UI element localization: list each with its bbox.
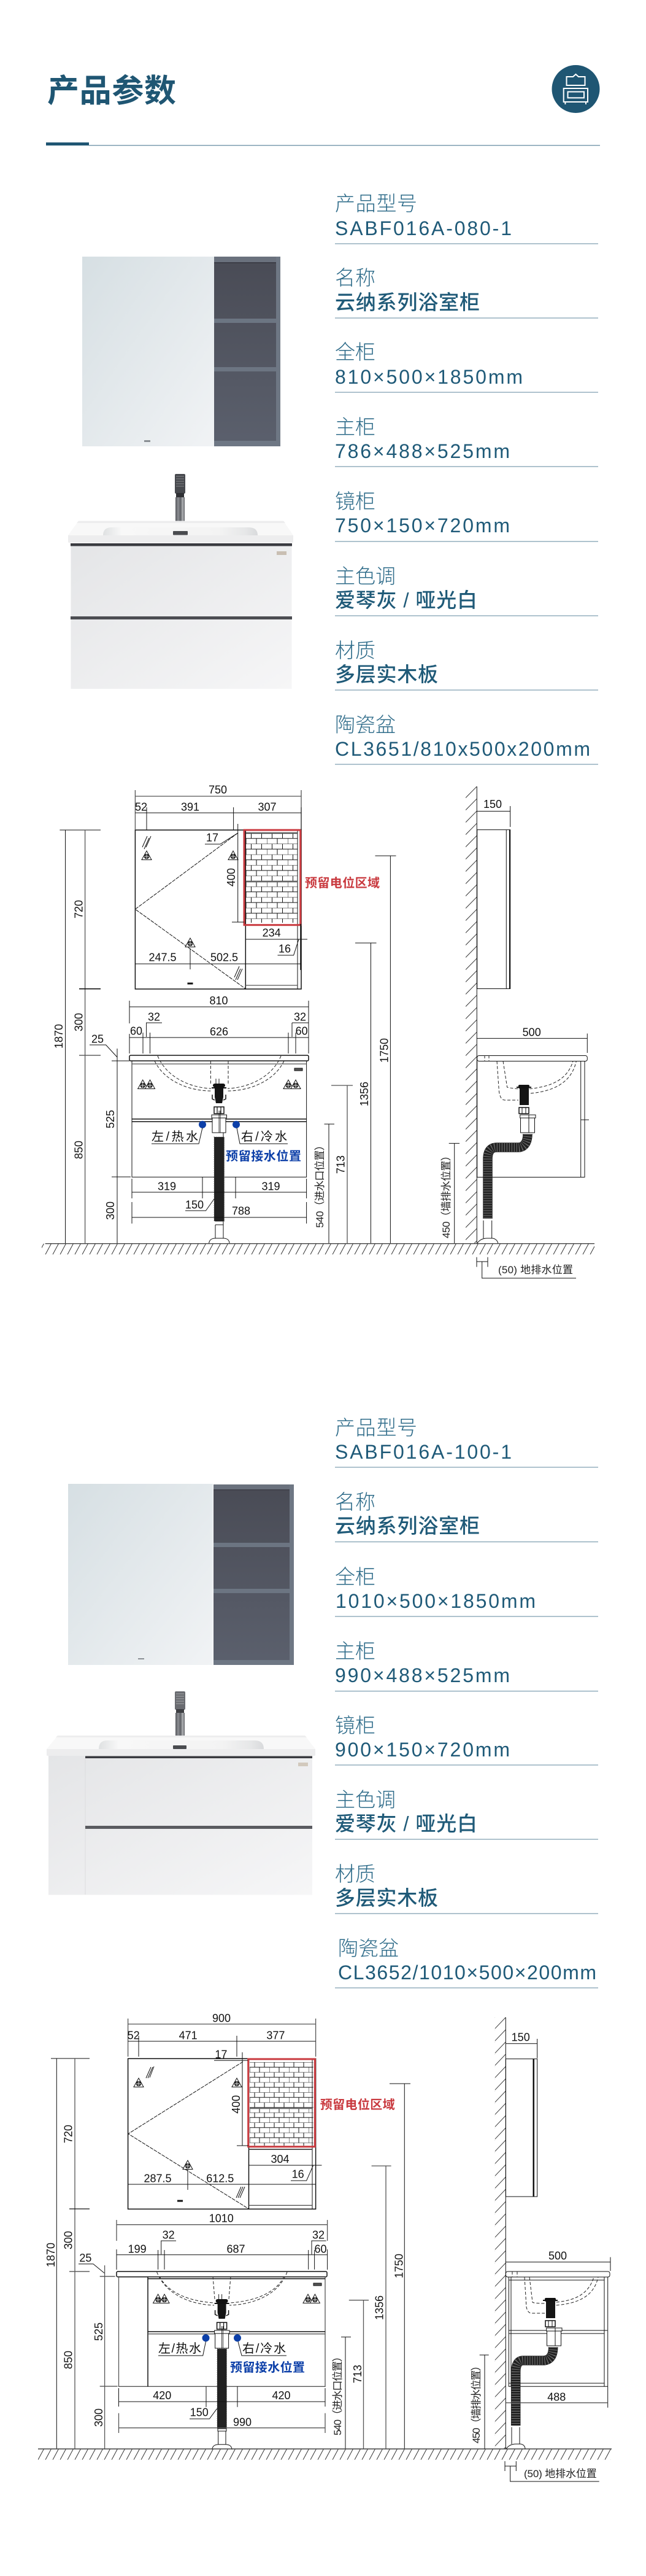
water supply points [158, 2334, 286, 2356]
vanity dimensions: 687 [226, 2243, 245, 2256]
water supply points: 左/热水 [158, 2341, 201, 2356]
vanity side: 500 [523, 1026, 541, 1039]
wall and floor drain dimensions [440, 1143, 576, 1278]
vanity dimensions: 25 [79, 2252, 91, 2264]
label: reserved electrical area: 预留电位区域 [305, 875, 380, 890]
vanity dimensions: 420 [153, 2389, 171, 2402]
wall and floor drain dimensions [471, 2355, 599, 2481]
spec: main colour [335, 1788, 598, 1839]
height dimensions: 300 [72, 1013, 85, 1031]
mirror cabinet dimensions: 52 [128, 2030, 140, 2042]
mirror cabinet dimensions: 17 [206, 831, 218, 844]
water supply points: 左/热水 [152, 1130, 198, 1144]
product photo: mirror cabinet 1 [82, 257, 280, 446]
drawing: product 2 side elevation [471, 2017, 610, 2481]
mirror cabinet dimensions: 247.5 [148, 952, 177, 964]
vanity dimensions: 199 [128, 2243, 147, 2256]
vanity dimensions: 32 [163, 2229, 175, 2241]
mirror cabinet dimensions [128, 2012, 321, 2190]
vanity dimensions: 300 [104, 1201, 117, 1220]
vanity dimensions [69, 2213, 328, 2449]
vanity dimensions: 990 [233, 2416, 252, 2429]
spec: name: 名称 [335, 266, 375, 289]
mirror cabinet side [477, 798, 510, 988]
spec: material: 多层实木板 [335, 663, 438, 686]
spec: ceramic basin [335, 713, 598, 764]
drawing: product 1 front elevation [42, 783, 594, 1254]
spec: name: 名称 [335, 1491, 375, 1513]
vanity dimensions: 300 [93, 2408, 105, 2427]
mirror cabinet dimensions: 900 [212, 2012, 231, 2025]
vanity dimensions: 60 [130, 1025, 142, 1038]
mirror cabinet dimensions: 400 [225, 868, 237, 886]
spec: main cabinet [335, 1640, 598, 1691]
label: reserved water position: 预留接水位置 [230, 2360, 305, 2375]
drawing: product 2 front elevation [38, 2012, 612, 2460]
vanity dimensions: 25 [91, 1033, 104, 1045]
height dimensions: 713 [335, 1155, 347, 1174]
spec: ceramic basin [335, 1937, 598, 1988]
product photo: mirror cabinet 2 [68, 1484, 294, 1665]
header rule [46, 142, 600, 146]
height dimensions: 720 [63, 2125, 75, 2143]
spec: model [335, 1416, 598, 1467]
spec: main cabinet: 主柜 [335, 416, 375, 438]
spec: material: 材质 [335, 639, 375, 662]
height dimensions: 850 [63, 2351, 75, 2369]
spec: material [335, 1863, 598, 1914]
height dimensions: 540（进水口位置） [314, 1140, 326, 1228]
wall and floor drain dimensions: (50) 地排水位置 [498, 1264, 573, 1276]
vanity dimensions [79, 995, 309, 1244]
spec: model: 产品型号 [335, 1416, 417, 1439]
drawing: product 1 side elevation [440, 786, 589, 1278]
spec: model: 产品型号 [335, 192, 417, 215]
mirror cabinet elevation [135, 830, 301, 989]
spec: overall size [335, 1565, 598, 1616]
spec: ceramic basin: CL3652/1010×500×200mm [338, 1961, 596, 1984]
mirror cabinet dimensions: 377 [266, 2030, 285, 2042]
vanity side [506, 2249, 610, 2449]
spec: main colour: 主色调 [335, 565, 396, 588]
spec: overall size: 810×500×1850mm [335, 366, 523, 388]
floor hatch [38, 2449, 612, 2460]
water supply points [152, 1121, 288, 1144]
faucet [174, 474, 186, 526]
vanity dimensions: 525 [104, 1110, 117, 1128]
vanity dimensions: 1010 [209, 2213, 234, 2225]
mirror cabinet dimensions: 471 [179, 2030, 198, 2042]
icon: cabinet badge [552, 65, 600, 113]
vanity elevation [129, 1055, 309, 1244]
vanity dimensions: 150 [185, 1198, 204, 1211]
faucet [174, 1691, 186, 1740]
spec: mirror cabinet: 镜柜 [335, 490, 375, 513]
product photo: vanity 1 [68, 474, 293, 689]
spec: name: 云纳系列浴室柜 [335, 1515, 480, 1537]
mirror cabinet dimensions: 17 [215, 2048, 227, 2060]
mirror cabinet side: 150 [512, 2031, 530, 2043]
height dimensions: 1870 [53, 1024, 65, 1049]
label: reserved electrical area: 预留电位区域 [320, 2097, 395, 2112]
spec: material: 多层实木板 [335, 1887, 438, 1909]
water supply points: 右/冷水 [241, 1130, 287, 1144]
mirror cabinet side [506, 2031, 537, 2197]
mirror cabinet dimensions [135, 783, 307, 969]
wall and floor drain dimensions: 450（墙排水位置） [471, 2361, 482, 2443]
height dimensions [53, 830, 396, 1244]
vanity dimensions: 32 [148, 1011, 160, 1023]
spec: main colour [335, 565, 598, 616]
vanity side: 488 [547, 2391, 566, 2403]
mirror cabinet dimensions: 750 [209, 783, 227, 796]
panel: product 1 specs [335, 192, 598, 764]
wall and floor drain dimensions: 450（墙排水位置） [440, 1150, 452, 1238]
mirror cabinet dimensions: 612.5 [206, 2172, 234, 2184]
vanity dimensions: 788 [232, 1205, 250, 1217]
vanity dimensions: 60 [296, 1025, 308, 1038]
mirror cabinet dimensions: 400 [230, 2095, 242, 2114]
spec: material: 材质 [335, 1863, 375, 1885]
vanity dimensions: 150 [190, 2407, 209, 2419]
mirror cabinet dimensions: 304 [271, 2153, 290, 2165]
height dimensions: 300 [63, 2231, 75, 2249]
mirror cabinet dimensions: 16 [292, 2168, 304, 2181]
height dimensions: 1870 [45, 2243, 57, 2267]
vanity dimensions: 525 [93, 2322, 105, 2341]
mirror cabinet dimensions: 16 [279, 943, 291, 955]
spec: mirror cabinet [335, 490, 598, 541]
spec: main cabinet: 990×488×525mm [335, 1664, 510, 1686]
mirror cabinet side: 150 [483, 798, 502, 810]
wall and floor drain dimensions: (50) 地排水位置 [524, 2468, 597, 2480]
height dimensions: 1750 [393, 2254, 405, 2278]
title: 产品参数 [47, 74, 176, 109]
mirror cabinet dimensions: 52 [135, 801, 147, 813]
height dimensions: 850 [72, 1141, 85, 1159]
spec: mirror cabinet: 900×150×720mm [335, 1739, 510, 1761]
spec: main cabinet [335, 416, 598, 467]
vanity side [477, 1026, 589, 1243]
vanity side: 500 [548, 2249, 567, 2262]
height dimensions [45, 2058, 410, 2449]
height dimensions: 1750 [378, 1038, 390, 1063]
wall [495, 2017, 506, 2449]
height dimensions: 1356 [373, 2295, 385, 2320]
vanity dimensions: 420 [272, 2389, 291, 2402]
spec: ceramic basin: 陶瓷盆 [338, 1937, 399, 1960]
vanity dimensions: 810 [209, 995, 228, 1007]
spec: overall size: 1010×500×1850mm [336, 1590, 536, 1612]
spec: name [335, 266, 598, 318]
floor hatch [42, 1244, 594, 1254]
spec: model: SABF016A-100-1 [335, 1441, 512, 1463]
water supply points: 右/冷水 [242, 2341, 286, 2356]
spec: overall size [335, 341, 598, 392]
mirror cabinet dimensions: 234 [263, 927, 281, 939]
spec: mirror cabinet: 镜柜 [335, 1714, 375, 1737]
spec: overall size: 全柜 [335, 1565, 375, 1588]
vanity dimensions: 626 [210, 1025, 228, 1038]
height dimensions: 720 [72, 900, 85, 918]
vanity dimensions: 32 [294, 1011, 306, 1023]
spec: name [335, 1491, 598, 1542]
spec: material [335, 639, 598, 690]
mirror cabinet dimensions: 287.5 [144, 2172, 172, 2184]
spec: main cabinet: 786×488×525mm [335, 440, 510, 462]
spec: ceramic basin: CL3651/810x500x200mm [335, 738, 590, 760]
vanity dimensions: 32 [312, 2229, 325, 2241]
spec: model: SABF016A-080-1 [335, 217, 512, 239]
spec: main cabinet: 主柜 [335, 1640, 375, 1662]
wall [466, 786, 477, 1243]
spec: name: 云纳系列浴室柜 [335, 291, 480, 314]
mirror cabinet dimensions: 307 [258, 801, 277, 813]
height dimensions: 540（进水口位置） [332, 2351, 344, 2435]
mirror cabinet dimensions: 391 [181, 801, 199, 813]
vanity dimensions: 319 [261, 1180, 280, 1192]
spec: main colour: 爱琴灰 / 哑光白 [335, 589, 477, 611]
height dimensions: 1356 [358, 1082, 371, 1106]
spec: model [335, 192, 598, 244]
spec: ceramic basin: 陶瓷盆 [335, 713, 396, 736]
mirror cabinet elevation [128, 2058, 316, 2209]
vanity dimensions: 60 [314, 2243, 327, 2256]
spec: mirror cabinet [335, 1714, 598, 1765]
product photo: vanity 2 [47, 1691, 315, 1895]
mirror cabinet dimensions: 502.5 [210, 952, 238, 964]
vanity dimensions: 319 [158, 1180, 176, 1192]
label: reserved water position: 预留接水位置 [226, 1149, 301, 1163]
panel: product 2 specs [335, 1416, 598, 1988]
vanity elevation [117, 2271, 327, 2450]
spec: overall size: 全柜 [335, 341, 375, 363]
spec: main colour: 主色调 [335, 1788, 396, 1811]
spec: mirror cabinet: 750×150×720mm [335, 514, 510, 537]
spec: main colour: 爱琴灰 / 哑光白 [335, 1812, 477, 1835]
height dimensions: 713 [352, 2365, 364, 2383]
